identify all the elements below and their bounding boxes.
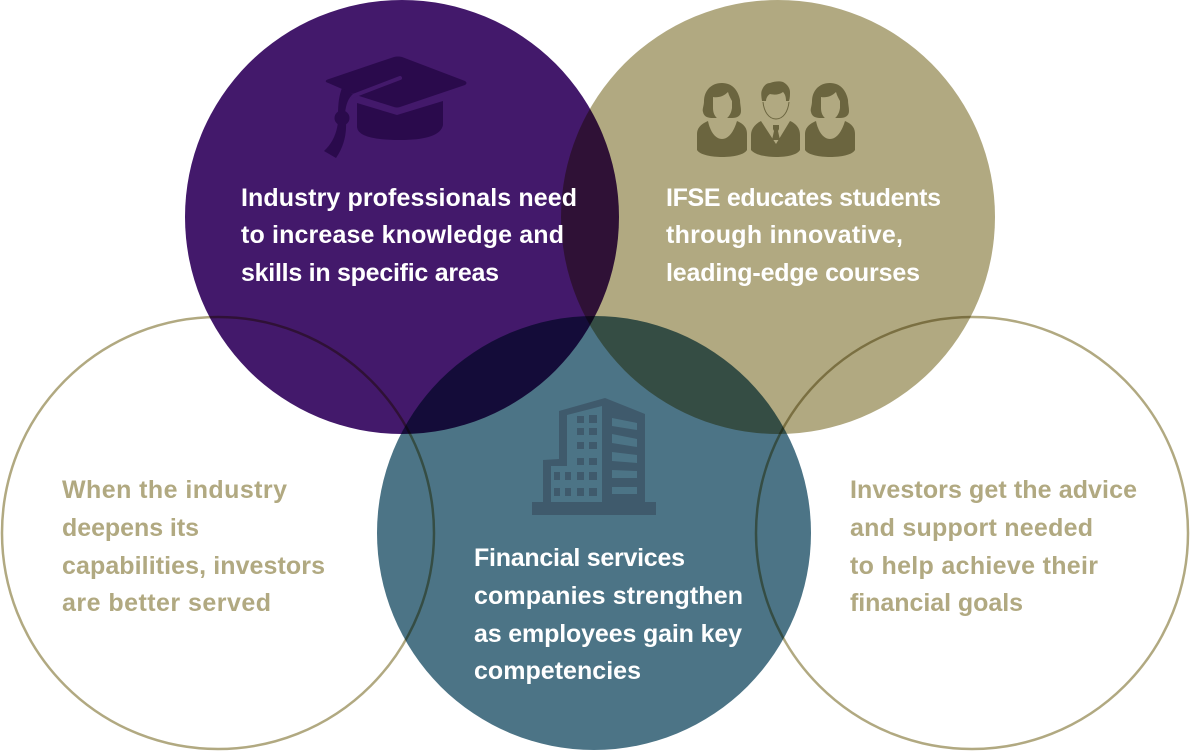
text: tan circle: IFSE educates students [666, 184, 941, 212]
text: tan circle [666, 184, 941, 287]
text: teal circle: Financial services [474, 544, 685, 572]
text: right outlined circle [850, 476, 1137, 617]
text: purple circle [241, 184, 577, 287]
icon: woman right [805, 83, 855, 157]
text: left outlined circle: are better served [62, 589, 271, 617]
text: left outlined circle: capabilities, investors [62, 552, 325, 580]
text: left outlined circle: deepens its [62, 514, 199, 542]
text: purple circle: to increase knowledge and [241, 221, 564, 249]
text: purple circle: Industry professionals need [241, 184, 577, 212]
text: tan circle: through innovative, [666, 221, 903, 249]
text: teal circle: as employees gain key [474, 620, 742, 648]
text: right outlined circle: to help achieve their [850, 552, 1098, 580]
text: tan circle: leading-edge courses [666, 259, 920, 287]
icon: graduation cap [324, 56, 466, 158]
circle: outlined right investors [756, 317, 1188, 749]
text: right outlined circle: financial goals [850, 589, 1023, 617]
icon: man centre [751, 81, 800, 157]
text: teal circle: companies strengthen [474, 582, 743, 610]
text: right outlined circle: and support needed [850, 514, 1093, 542]
circle: tan students [561, 0, 995, 434]
text: left outlined circle: When the industry [62, 476, 287, 504]
circle: purple professionals [185, 0, 619, 434]
circle: outlined left investors [2, 317, 434, 749]
icon: three people [697, 81, 855, 157]
text: right outlined circle: Investors get the advice [850, 476, 1137, 504]
text: left outlined circle [62, 476, 325, 617]
text: teal circle [474, 544, 743, 685]
text: teal circle: competencies [474, 657, 641, 685]
text: purple circle: skills in specific areas [241, 259, 499, 287]
circle: teal companies [377, 316, 811, 750]
icon: office building [532, 398, 656, 515]
icon: woman left [697, 83, 747, 157]
